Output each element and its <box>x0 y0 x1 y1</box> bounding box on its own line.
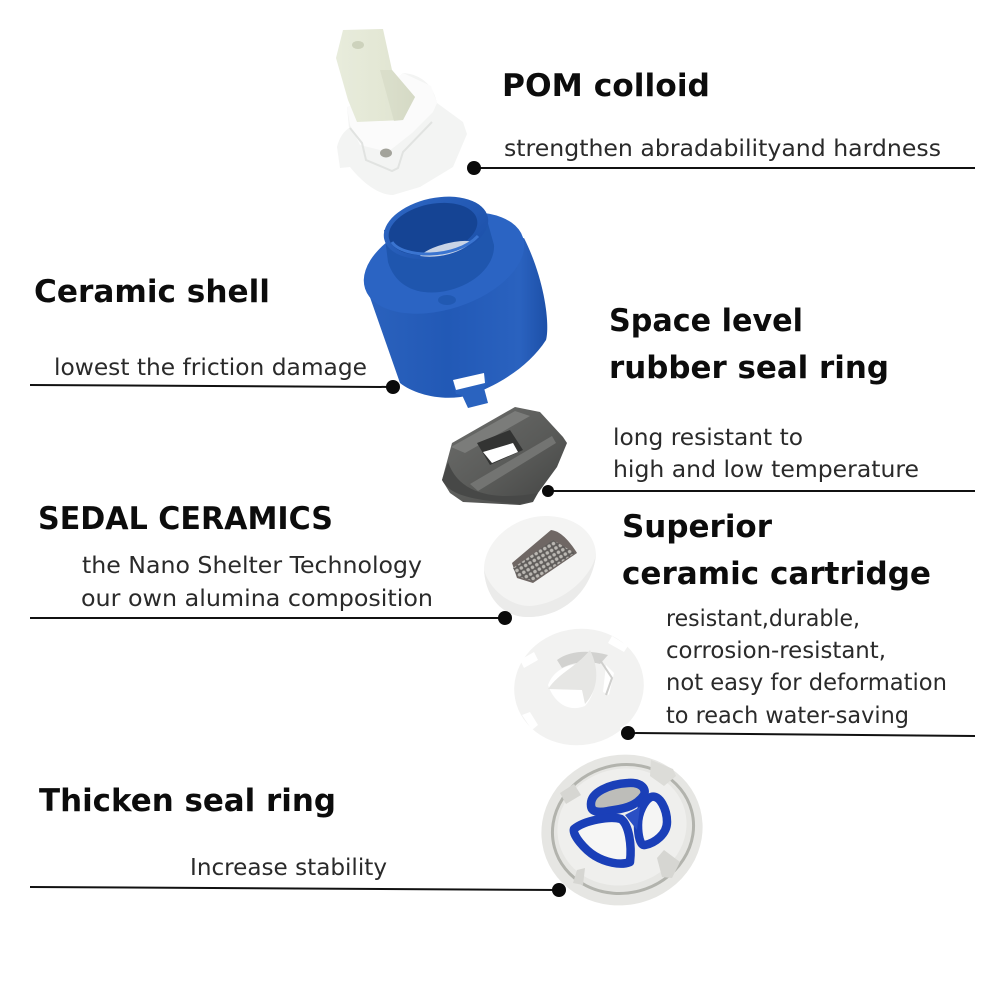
text: cartridge line 2: corrosion-resistant, <box>666 638 886 664</box>
part: thicken seal ring assembly <box>524 737 720 923</box>
part: POM colloid stem and base <box>336 29 467 195</box>
callout: POM colloid <box>467 68 975 175</box>
leader line: sedal <box>30 611 512 625</box>
text: cartridge line 4: to reach water-saving <box>666 703 909 729</box>
callout: Thicken seal ring <box>30 783 566 897</box>
heading: Thicken seal ring: Thicken seal ring <box>39 783 336 819</box>
part: ceramic disc with mesh filter <box>484 516 596 617</box>
callout: Ceramic shell <box>30 274 400 394</box>
text: POM description: strengthen abradabilityand hardness <box>504 136 941 162</box>
callout: Superior ceramic cartridge <box>621 509 975 740</box>
part: ceramic cartridge disc <box>505 619 653 755</box>
heading: Space level: Space level <box>609 303 803 339</box>
text: seal description line 1: long resistant to <box>613 425 803 451</box>
leader line: seal <box>542 485 975 497</box>
heading: POM colloid: POM colloid <box>502 68 710 104</box>
leader line: shell <box>30 380 400 394</box>
part: blue ceramic shell <box>351 188 547 408</box>
text: sedal line 2: our own alumina composition <box>81 586 433 612</box>
heading: ceramic cartridge: ceramic cartridge <box>622 556 931 592</box>
heading: SEDAL CERAMICS: SEDAL CERAMICS <box>38 501 333 537</box>
blue gasket: right <box>638 797 667 845</box>
text: seal description line 2: high and low temperature <box>613 457 919 483</box>
callout: Space level rubber seal ring <box>542 303 975 497</box>
blue gasket: lower left <box>574 818 631 864</box>
heading: rubber seal ring: rubber seal ring <box>609 350 889 386</box>
text: shell description: lowest the friction damage <box>54 355 367 381</box>
part: grey rubber seal ring <box>442 407 567 505</box>
leader line: POM <box>467 161 975 175</box>
text: sedal line 1: the Nano Shelter Technology <box>82 553 422 579</box>
text: cartridge line 1: resistant,durable, <box>666 606 860 632</box>
text: thicken description: Increase stability <box>190 855 387 881</box>
heading: Superior: Superior <box>622 509 773 545</box>
heading: Ceramic shell: Ceramic shell <box>34 274 270 310</box>
text: cartridge line 3: not easy for deformation <box>666 670 947 696</box>
leader line: cartridge <box>621 726 975 740</box>
leader line: thicken <box>30 883 566 897</box>
blue gasket: top <box>591 783 645 812</box>
callout: SEDAL CERAMICS <box>30 501 512 625</box>
